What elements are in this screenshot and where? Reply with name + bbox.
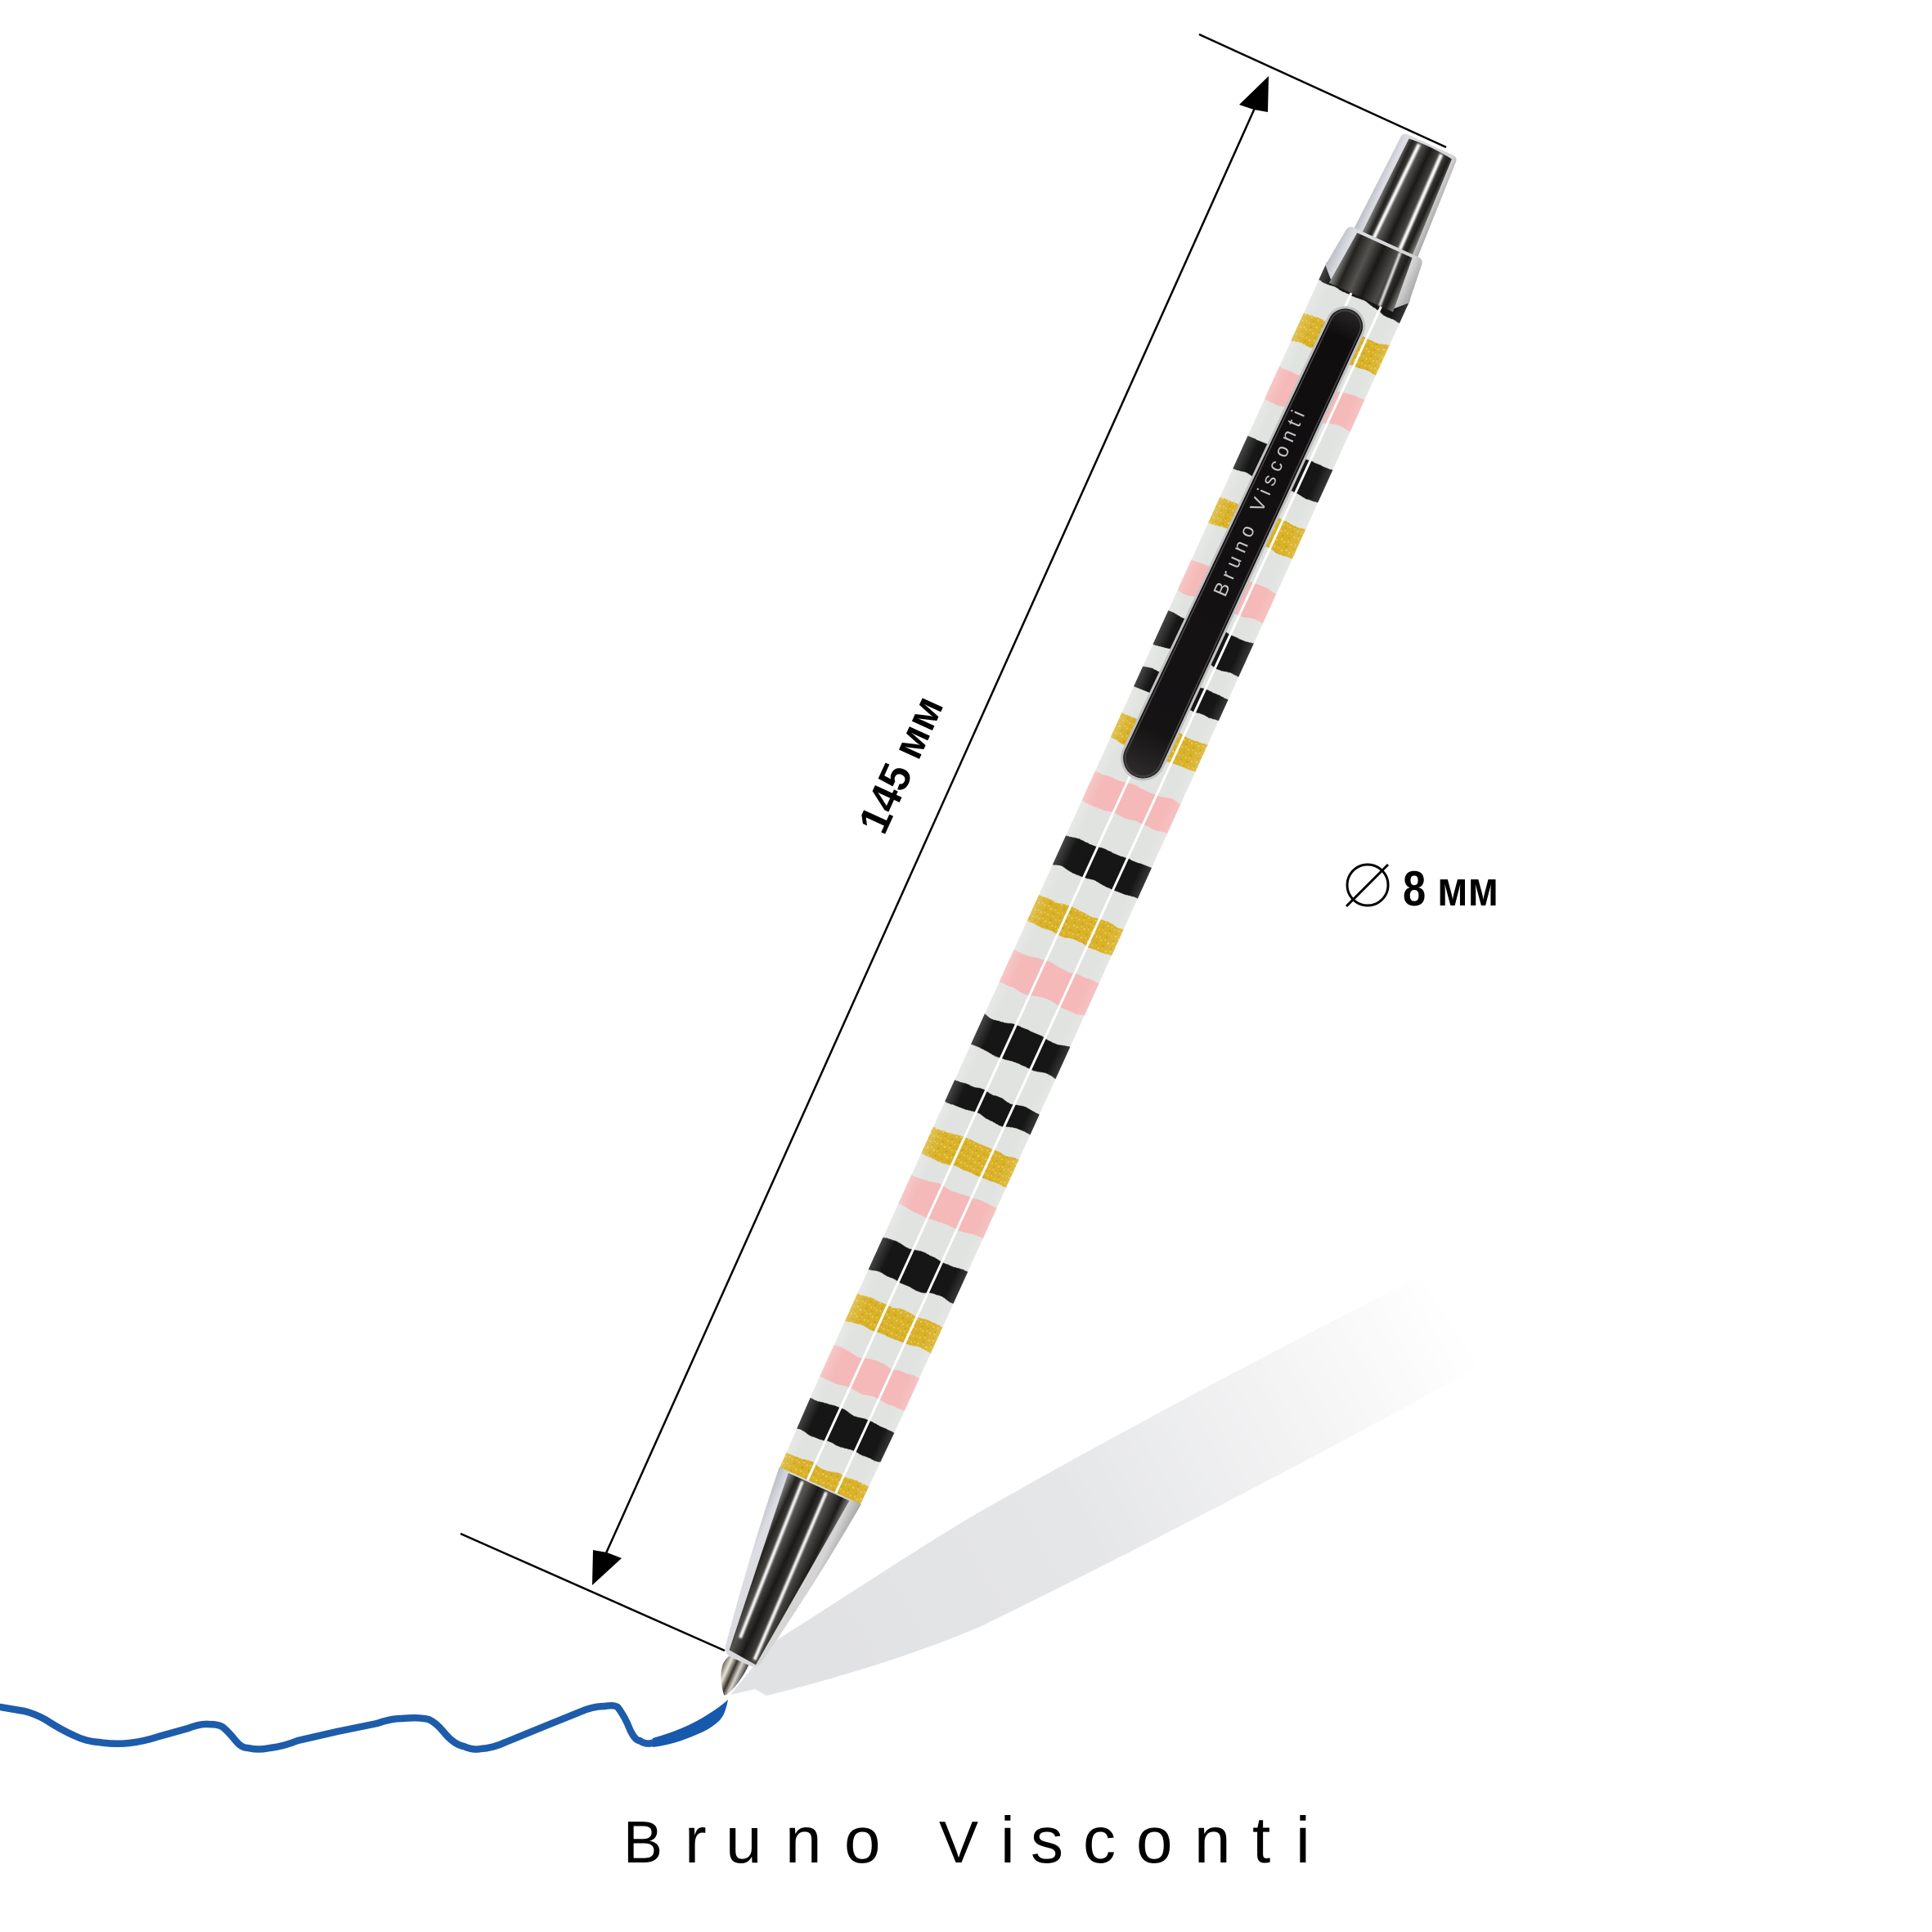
- brand name: B: [623, 1810, 663, 1876]
- pink stripe: [1178, 559, 1276, 623]
- black stripe: [1233, 435, 1333, 503]
- length dimension arrow: [592, 76, 1269, 1585]
- diameter icon: [1346, 865, 1388, 906]
- gold stripe: [1208, 497, 1305, 559]
- pen: [721, 134, 1456, 1696]
- black stripe: [1052, 835, 1152, 899]
- thin black stripe: [945, 1080, 1040, 1135]
- metal cone tip: [699, 1467, 861, 1680]
- diameter label: 8 мм: [1403, 861, 1498, 916]
- collar: [1319, 223, 1428, 317]
- dimension extension line: bottom: [461, 1534, 725, 1651]
- ink scribble line: [0, 1700, 728, 1750]
- gold stripe: [1111, 712, 1207, 772]
- pink stripe: [820, 1345, 919, 1411]
- black stripe: [869, 1237, 968, 1304]
- brand name: V: [939, 1810, 978, 1876]
- painted stripes: [765, 253, 1422, 1516]
- pink stripe: [1000, 950, 1099, 1016]
- gold stripe: [1291, 312, 1390, 376]
- push button cap: [1352, 130, 1462, 263]
- barrel with stripes: [764, 253, 1422, 1518]
- brand name: isconti: [1000, 1804, 1310, 1876]
- black stripe: [1153, 610, 1254, 677]
- gold stripe: [1027, 895, 1124, 955]
- gold stripe: [845, 1293, 942, 1354]
- black stripe: [970, 1013, 1070, 1080]
- pink stripe: [898, 1175, 996, 1238]
- barrel edge shading: [775, 262, 1410, 1513]
- gold stripe: [780, 1453, 869, 1504]
- thin black stripe: [1134, 666, 1229, 721]
- pen shadow: [730, 1277, 1480, 1696]
- brand name: runo: [685, 1804, 880, 1876]
- top black stripe: [1319, 262, 1410, 324]
- engraved brand on clip: Bruno Visconti: [1210, 407, 1310, 600]
- pink stripe: [1082, 771, 1181, 834]
- length label: 145 мм: [850, 689, 953, 841]
- pocket clip: [1115, 299, 1370, 788]
- black stripe: [797, 1397, 895, 1462]
- dimension extension line: top: [1199, 34, 1446, 147]
- barrel reflections: [807, 283, 1385, 1496]
- ball point nib: [712, 1645, 753, 1700]
- gold stripe: [921, 1126, 1019, 1188]
- pink stripe: [1265, 366, 1364, 432]
